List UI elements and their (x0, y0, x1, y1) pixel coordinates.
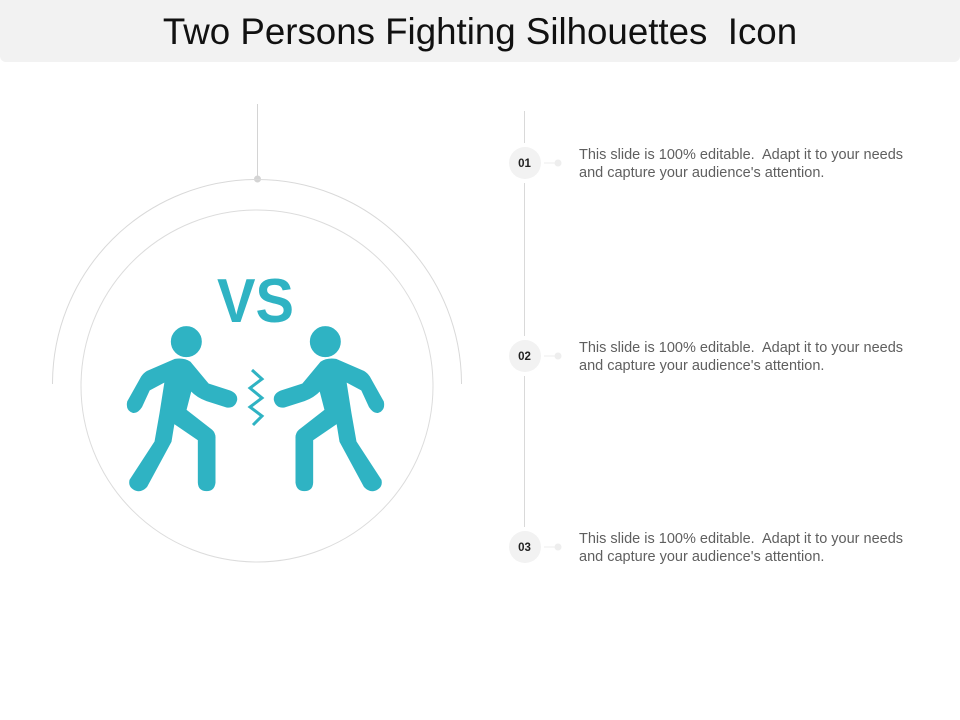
title (0, 0, 960, 62)
right person silhouette (274, 327, 384, 491)
connector 02 (544, 352, 562, 360)
number 02 (508, 340, 540, 372)
text block 01: This slide is 100% editable. Adapt it to your needs and capture your audience's attention. (579, 146, 903, 180)
connector 01 (544, 160, 562, 166)
number 01 (508, 147, 540, 179)
VS label: VS (217, 267, 294, 336)
outer arc (52, 180, 462, 384)
connector 03 (544, 544, 562, 550)
number 01: 01 (518, 158, 531, 170)
lightning zigzag (250, 370, 262, 425)
number 03: 03 (518, 542, 531, 554)
number 03 (508, 531, 540, 563)
inner circle (81, 210, 433, 562)
pointer line and dot (254, 104, 261, 182)
title: Two Persons Fighting Silhouettes Icon (163, 11, 797, 52)
left person silhouette (127, 327, 237, 491)
timeline (524, 111, 526, 527)
text block 03: This slide is 100% editable. Adapt it to your needs and capture your audience's attention. (579, 531, 903, 565)
text block 02: This slide is 100% editable. Adapt it to your needs and capture your audience's attention. (579, 340, 903, 374)
number 02: 02 (518, 351, 531, 363)
